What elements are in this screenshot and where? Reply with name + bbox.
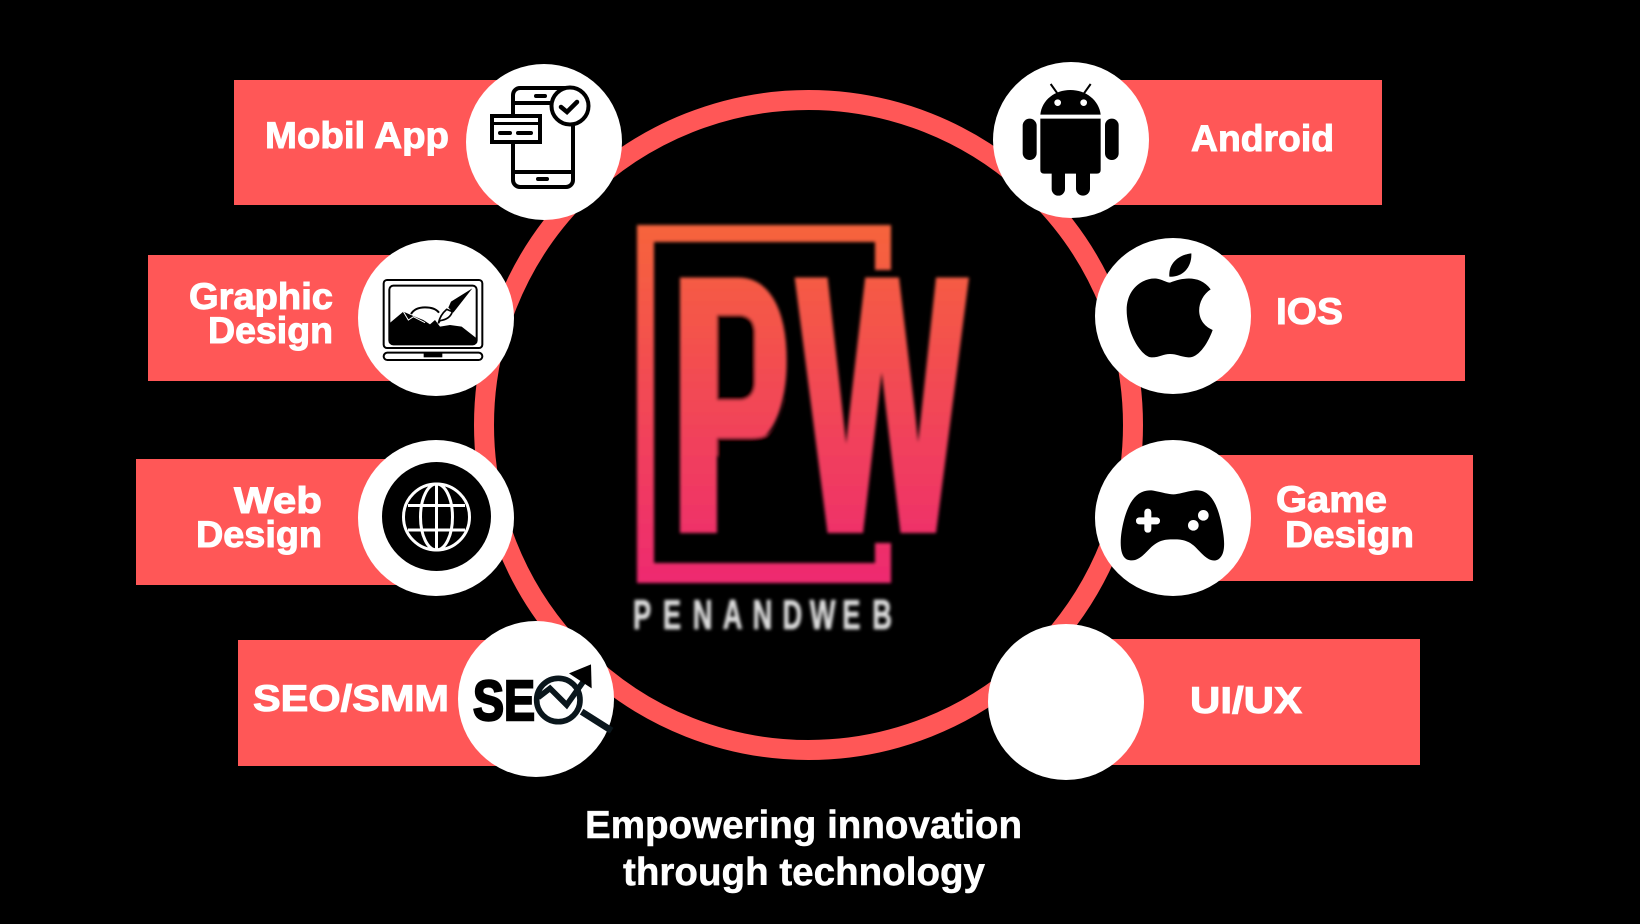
central ring xyxy=(484,100,1133,750)
icon: globe xyxy=(382,462,491,571)
label xyxy=(1276,479,1414,555)
label xyxy=(196,480,322,555)
bar xyxy=(1173,455,1473,581)
logo wordmark: PENANDWEB xyxy=(633,591,892,638)
icon: phone with check and card xyxy=(492,88,588,187)
logo letters PW: W xyxy=(799,209,966,601)
panel: Android xyxy=(993,62,1382,218)
label: Web xyxy=(234,480,322,521)
tagline: Empowering innovation xyxy=(585,804,1022,847)
icon: SEO magnifier xyxy=(473,664,612,733)
bar xyxy=(148,255,436,381)
bar xyxy=(1071,80,1382,205)
bar xyxy=(1066,639,1420,765)
label: Design xyxy=(1285,514,1414,555)
icon circle xyxy=(993,62,1149,218)
panel: Web Design xyxy=(136,440,514,596)
icon circle xyxy=(988,624,1144,780)
panel: Mobil App xyxy=(234,64,622,220)
logo: PW PENANDWEB xyxy=(633,209,966,638)
tagline xyxy=(585,804,1022,894)
label: Mobil App xyxy=(265,115,449,156)
icon circle xyxy=(458,621,614,777)
icon circle xyxy=(1095,238,1251,394)
icon: game controller xyxy=(1121,490,1224,560)
icon circle xyxy=(358,440,514,596)
logo frame xyxy=(637,225,891,583)
label: Graphic xyxy=(189,276,333,317)
panel: Graphic Design xyxy=(148,240,514,396)
icon: laptop with painting xyxy=(384,280,482,360)
icon: android robot xyxy=(1023,84,1119,196)
bar xyxy=(234,80,544,205)
icon circle xyxy=(466,64,622,220)
panel: UI/UX xyxy=(988,624,1420,780)
label: SEO/SMM xyxy=(253,678,449,719)
icon circle xyxy=(358,240,514,396)
panel: IOS xyxy=(1095,238,1465,394)
tagline: through technology xyxy=(623,851,985,894)
label xyxy=(189,276,333,351)
panel: Game Design xyxy=(1095,440,1473,596)
label: IOS xyxy=(1276,291,1343,332)
label: Design xyxy=(208,310,333,351)
label: UI/UX xyxy=(1190,680,1302,721)
icon circle xyxy=(1095,440,1251,596)
logo letters PW xyxy=(672,209,966,601)
label: Design xyxy=(196,514,322,555)
icon: apple xyxy=(1127,253,1213,357)
label: Android xyxy=(1191,118,1334,159)
bar xyxy=(1173,255,1465,381)
label: Game xyxy=(1276,479,1387,520)
logo letters PW: P xyxy=(672,209,789,601)
bar xyxy=(238,640,536,766)
icon: SEO magnifier: SE xyxy=(473,669,535,733)
panel: SEO/SMM xyxy=(238,621,614,777)
bar xyxy=(136,459,436,585)
